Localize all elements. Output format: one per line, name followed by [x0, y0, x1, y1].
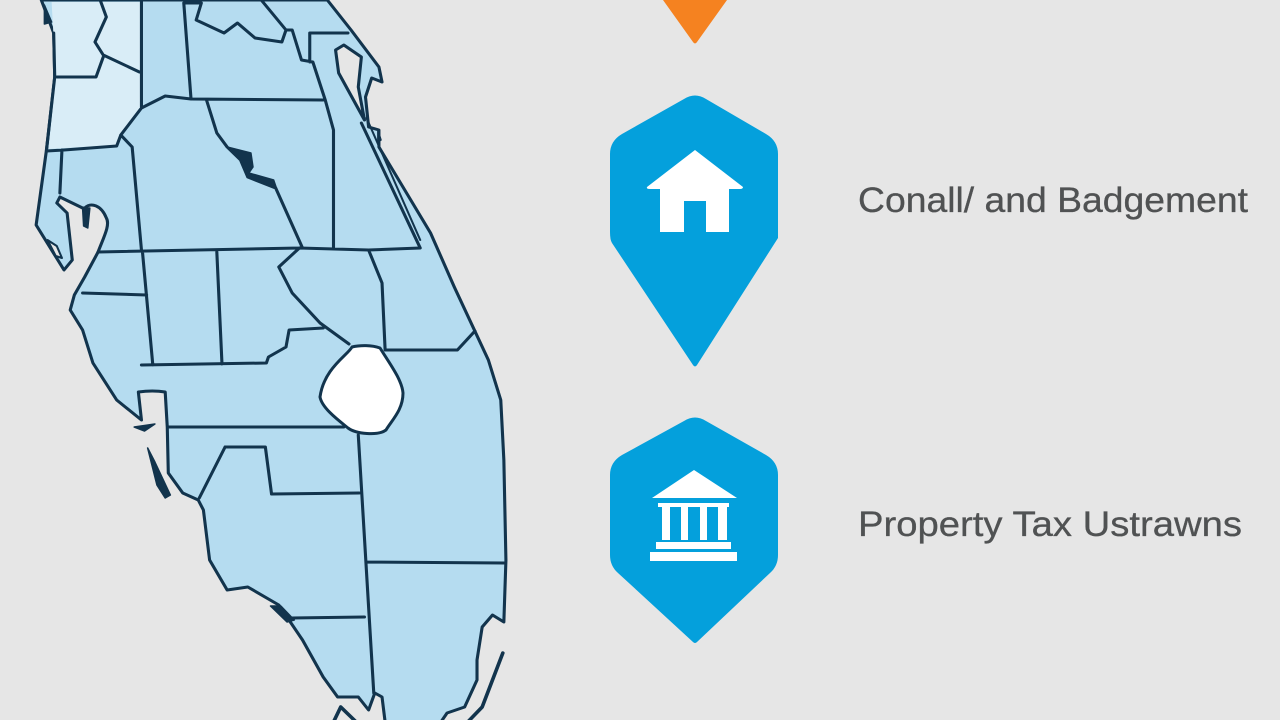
- lake: Okeechobee: [320, 346, 403, 434]
- icon: house marker: [610, 96, 778, 366]
- map: Florida peninsula counties: [36, 0, 506, 720]
- barrier island line: [367, 118, 420, 240]
- blue pin: [610, 96, 778, 366]
- label: Conall/ and Badgement: Conall/ and Badgement: [858, 181, 1248, 220]
- label: Property Tax Ustrawns: Property Tax Ustrawns: [858, 505, 1242, 544]
- inlet and keys: [47, 240, 62, 258]
- bank glyph: [650, 470, 737, 561]
- blue pin: [610, 418, 778, 643]
- river and coastal water details: [44, 5, 381, 622]
- state outline fill: [36, 0, 506, 720]
- county boundaries: [46, 0, 504, 693]
- icon: orange marker tip: [663, 0, 727, 44]
- east coast lagoon: [336, 45, 364, 120]
- lighter northwest counties: [49, 2, 140, 149]
- outline redraw over the lighter counties: [46, 33, 55, 150]
- icon: bank marker: [610, 418, 778, 643]
- house glyph: [647, 150, 743, 232]
